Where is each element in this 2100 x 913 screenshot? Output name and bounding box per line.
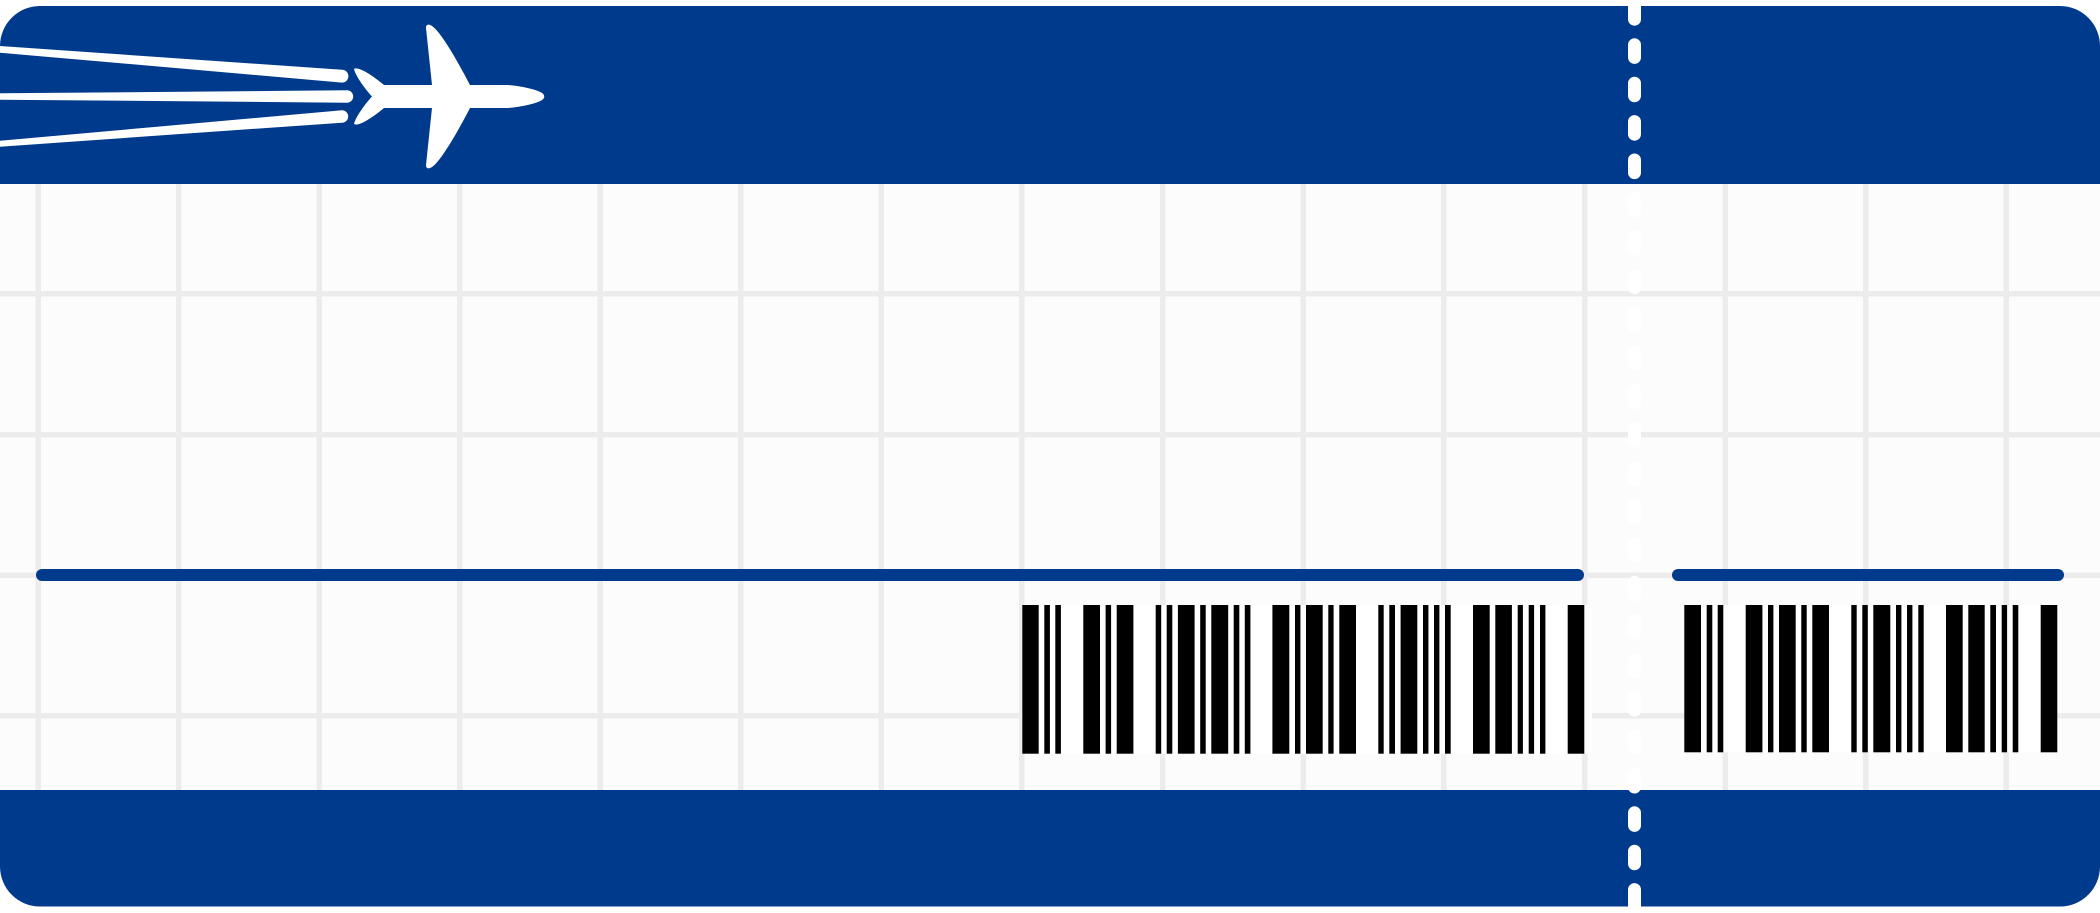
barcode: stub panel: [1684, 605, 2057, 752]
barcode: main panel: [1022, 605, 1592, 754]
panel: grid body: [0, 184, 2100, 790]
icon: speed trails: [0, 46, 353, 147]
rule: stub panel: [1672, 569, 2064, 581]
icon: airplane: [354, 25, 544, 168]
rule: main panel: [36, 569, 1584, 581]
perforation dashes: [1628, 6, 1641, 906]
panel: bottom band: [0, 790, 2100, 906]
panel: top band: [0, 6, 2100, 184]
